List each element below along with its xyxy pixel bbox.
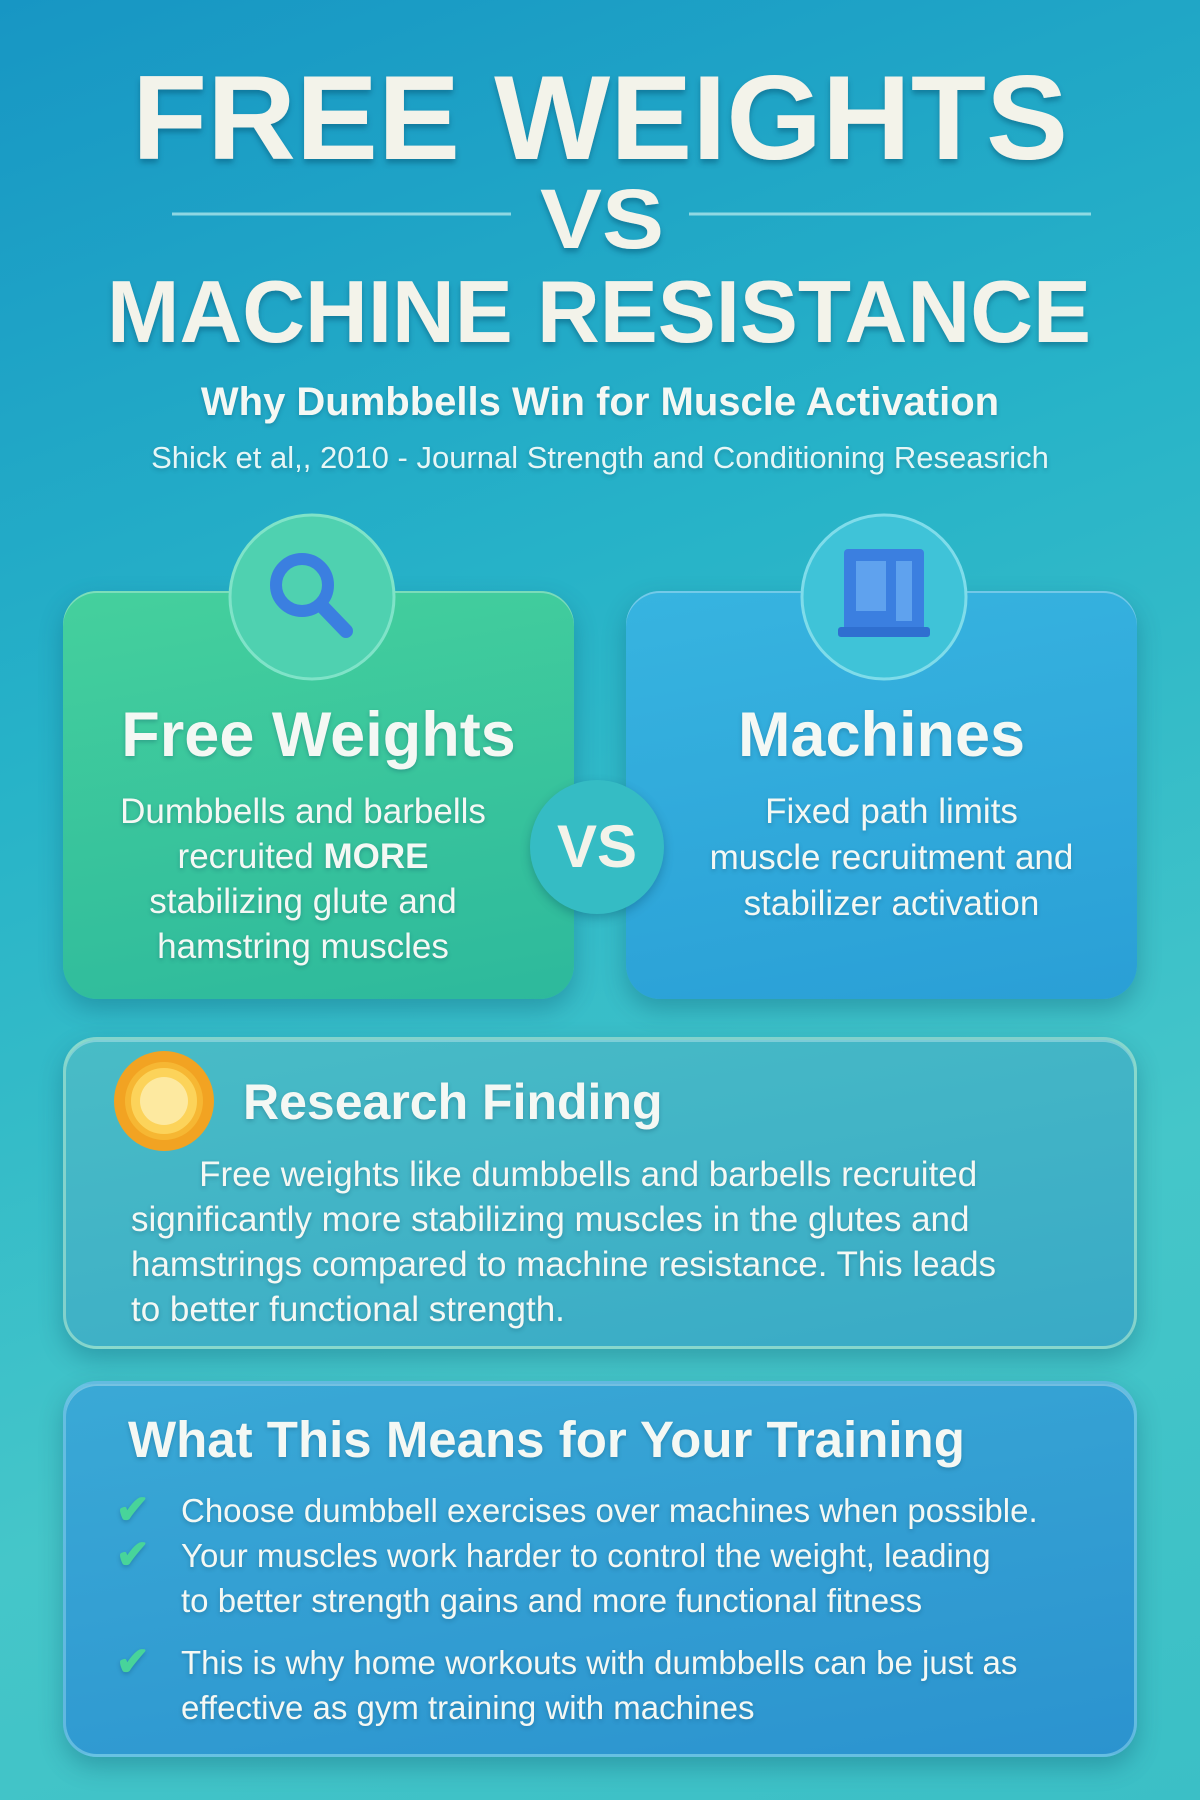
list: training bullets: Your muscles work harder to control the weight, leading <box>181 1537 991 1574</box>
list: training bullets: ✔ <box>116 1640 150 1684</box>
title: FREE WEIGHTS <box>132 51 1068 185</box>
icon: coin <box>114 1051 214 1151</box>
text: machines description: Fixed path limits <box>765 792 1018 831</box>
heading: training: What This Means for Your Training <box>128 1411 965 1468</box>
list: training bullets: Choose dumbbell exercises over machines when possible. <box>181 1492 1038 1529</box>
citation: Shick et al,, 2010 - Journal Strength and Conditioning Reseasrich <box>151 440 1049 475</box>
panel: training <box>63 1381 1137 1757</box>
text: free weights description: hamstring muscles <box>157 927 449 966</box>
list: training bullets: ✔ <box>116 1533 150 1577</box>
title <box>107 51 1091 361</box>
icon: vs badge: VS <box>557 813 637 880</box>
icon: machine <box>800 514 968 680</box>
title: VS <box>540 172 664 266</box>
heading: research finding: Research Finding <box>243 1074 663 1130</box>
list: training bullets: effective as gym training with machines <box>181 1689 754 1726</box>
text: research body: hamstrings compared to machine resistance. This leads <box>131 1245 996 1284</box>
panel: research finding <box>63 1037 1137 1349</box>
list: training bullets: This is why home workouts with dumbbells can be just as <box>181 1644 1017 1681</box>
text: free weights description <box>120 792 486 969</box>
text: research body: to better functional strength. <box>131 1290 565 1329</box>
text: research body: significantly more stabilizing muscles in the glutes and <box>131 1200 969 1239</box>
list: training bullets <box>116 1488 1038 1729</box>
text: free weights description: recruited MORE <box>178 837 428 876</box>
list: training bullets: ✔ <box>116 1488 150 1532</box>
panel: free weights <box>63 591 574 999</box>
text: research body: Free weights like dumbbells and barbells recruited <box>199 1155 977 1194</box>
panel: machines <box>626 591 1137 999</box>
text: free weights description: Dumbbells and barbells <box>120 792 486 831</box>
heading: machines: Machines <box>738 700 1025 770</box>
text: research body <box>131 1155 996 1332</box>
text: machines description <box>710 792 1073 923</box>
text: machines description: stabilizer activation <box>744 884 1039 923</box>
subtitle: Why Dumbbells Win for Muscle Activation <box>201 380 999 424</box>
icon: magnifier <box>228 514 396 680</box>
list: training bullets: to better strength gains and more functional fitness <box>181 1582 922 1619</box>
heading: free weights: Free Weights <box>121 700 516 770</box>
text: free weights description: stabilizing glute and <box>149 882 457 921</box>
title: MACHINE RESISTANCE <box>107 262 1091 361</box>
text: machines description: muscle recruitment and <box>710 838 1073 877</box>
icon: vs badge <box>530 780 664 914</box>
